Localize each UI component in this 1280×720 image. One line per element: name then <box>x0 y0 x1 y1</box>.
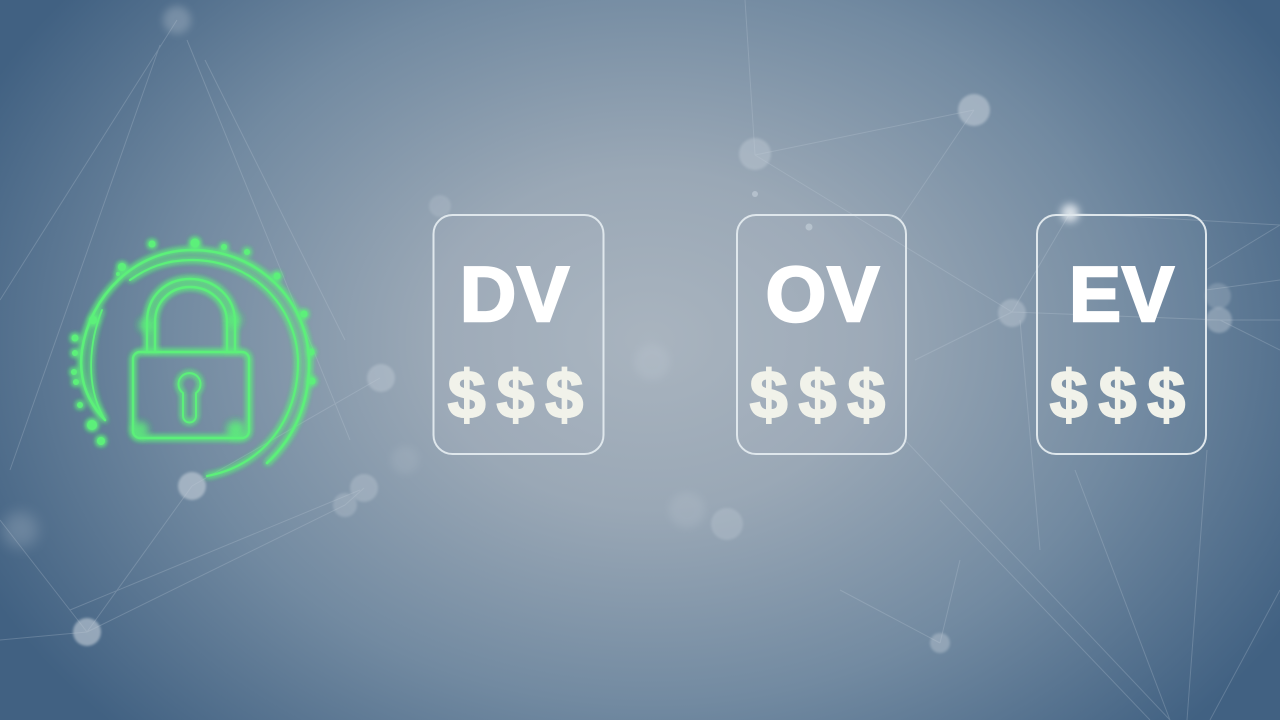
network node <box>73 618 101 646</box>
network node <box>958 94 990 126</box>
left inner ring arc <box>91 310 105 420</box>
padlock shackle <box>147 279 235 352</box>
icon: green padlock in circular ring <box>71 238 316 476</box>
network node <box>930 633 950 653</box>
price: EV: $$$ <box>1050 357 1196 433</box>
network node <box>350 474 378 502</box>
ring dots <box>71 238 316 445</box>
network node <box>1061 204 1079 222</box>
network node <box>333 493 357 517</box>
network node <box>634 344 670 380</box>
keyhole <box>178 373 200 422</box>
padlock body <box>133 352 249 438</box>
network node <box>1205 283 1231 309</box>
network node <box>711 508 743 540</box>
card: EV <box>1037 215 1206 454</box>
card: DV <box>434 215 604 454</box>
network node <box>391 446 419 474</box>
outer ring arc <box>81 250 309 463</box>
network node <box>1206 307 1232 333</box>
card: OV <box>737 215 906 454</box>
price: DV: $$$ <box>448 357 594 433</box>
network node <box>178 472 206 500</box>
card title: EV: EV <box>1069 250 1175 338</box>
network node <box>752 191 758 197</box>
card title: OV: OV <box>766 250 880 338</box>
network node <box>669 492 705 528</box>
inner ring arc <box>130 260 298 476</box>
lock highlights <box>134 315 243 437</box>
network node <box>2 512 38 548</box>
network node <box>367 364 395 392</box>
network node <box>739 138 771 170</box>
network node <box>806 224 812 230</box>
network node <box>998 299 1026 327</box>
network node <box>429 195 451 217</box>
card title: DV: DV <box>460 250 570 338</box>
price: OV: $$$ <box>750 357 896 433</box>
network node <box>163 6 191 34</box>
